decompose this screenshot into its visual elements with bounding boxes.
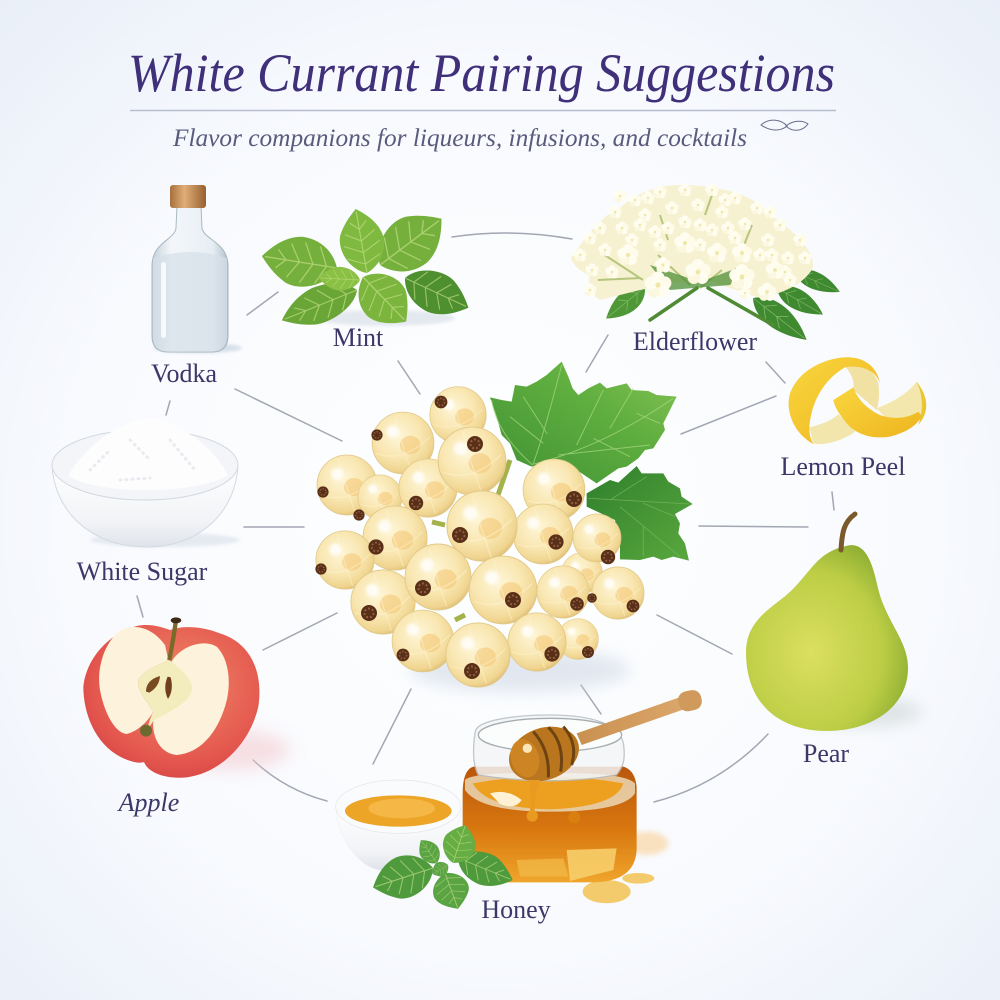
label: Honey: Honey <box>481 895 551 924</box>
title: White Currant Pairing Suggestions <box>128 43 835 103</box>
icon: honey jar <box>463 688 703 903</box>
icon: white sugar bowl <box>52 418 240 547</box>
currant leaves <box>490 362 693 561</box>
label: Elderflower: Elderflower <box>633 327 757 356</box>
small honey bowl <box>336 780 462 871</box>
label: Mint: Mint <box>333 323 384 352</box>
berries <box>316 387 644 687</box>
icon: elderflower <box>571 183 843 349</box>
icon: mint garnish <box>366 820 519 915</box>
icon: apple half <box>83 617 290 778</box>
label: Apple: Apple <box>117 788 179 817</box>
label: Lemon Peel: Lemon Peel <box>781 452 905 481</box>
label: Vodka: Vodka <box>151 359 217 388</box>
berry stems <box>432 460 510 620</box>
icon: pear <box>746 514 922 731</box>
icon: leaf ornament <box>761 120 808 130</box>
subtitle: Flavor companions for liqueurs, infusions, and cocktails <box>172 125 747 152</box>
label: White Sugar: White Sugar <box>77 557 208 586</box>
icon: lemon peel <box>789 357 926 444</box>
berry calyx dots <box>315 396 639 679</box>
label: Pear: Pear <box>803 739 849 768</box>
icon: mint sprig <box>258 198 477 338</box>
icon: vodka bottle <box>152 185 242 353</box>
main illustration: white currant cluster <box>315 362 693 692</box>
connector lines <box>137 233 834 802</box>
